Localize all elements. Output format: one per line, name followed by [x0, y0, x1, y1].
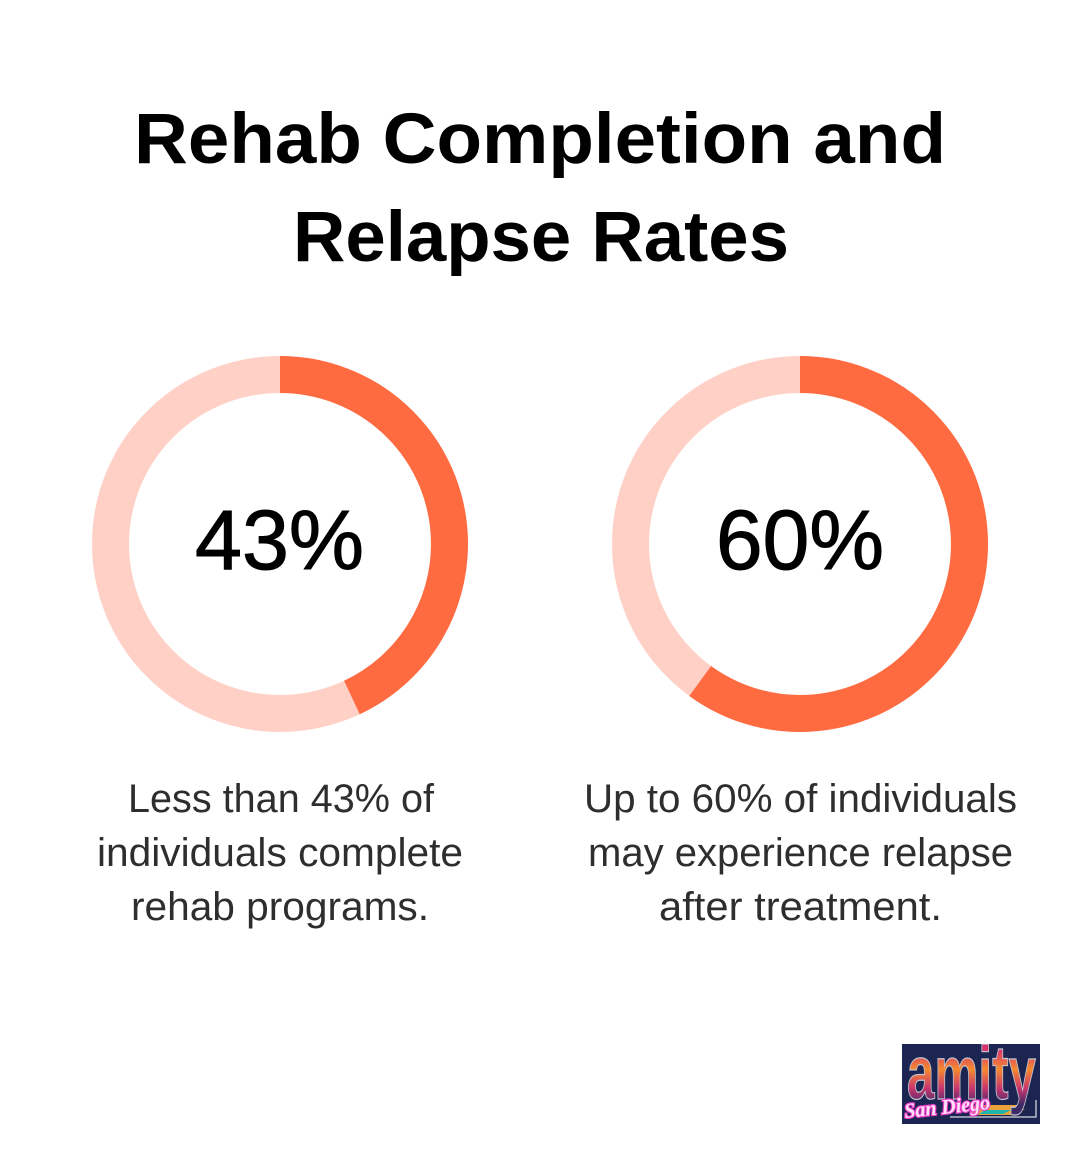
description: completion: rehab programs. — [131, 885, 429, 929]
description: completion: Less than 43% of — [128, 777, 435, 821]
description: completion: individuals complete — [97, 831, 463, 875]
title: Rehab Completion and — [134, 100, 946, 179]
panel: rehab completion — [97, 374, 463, 929]
donut chart: 60% — [630, 374, 970, 714]
panel: relapse — [584, 374, 1017, 929]
description: relapse: may experience relapse — [588, 831, 1013, 875]
description: relapse: after treatment. — [659, 885, 942, 929]
logo: Amity San Diego — [902, 1044, 1040, 1124]
title — [134, 100, 946, 277]
description: relapse: Up to 60% of individuals — [584, 777, 1017, 821]
logo script: San Diego — [903, 1090, 991, 1123]
stat: 43%: 43% — [195, 493, 364, 587]
donut chart: 43% — [110, 374, 450, 714]
description: relapse — [584, 777, 1017, 929]
stat: 60%: 60% — [716, 493, 884, 587]
description: completion — [97, 777, 463, 929]
title: Relapse Rates — [293, 198, 789, 277]
